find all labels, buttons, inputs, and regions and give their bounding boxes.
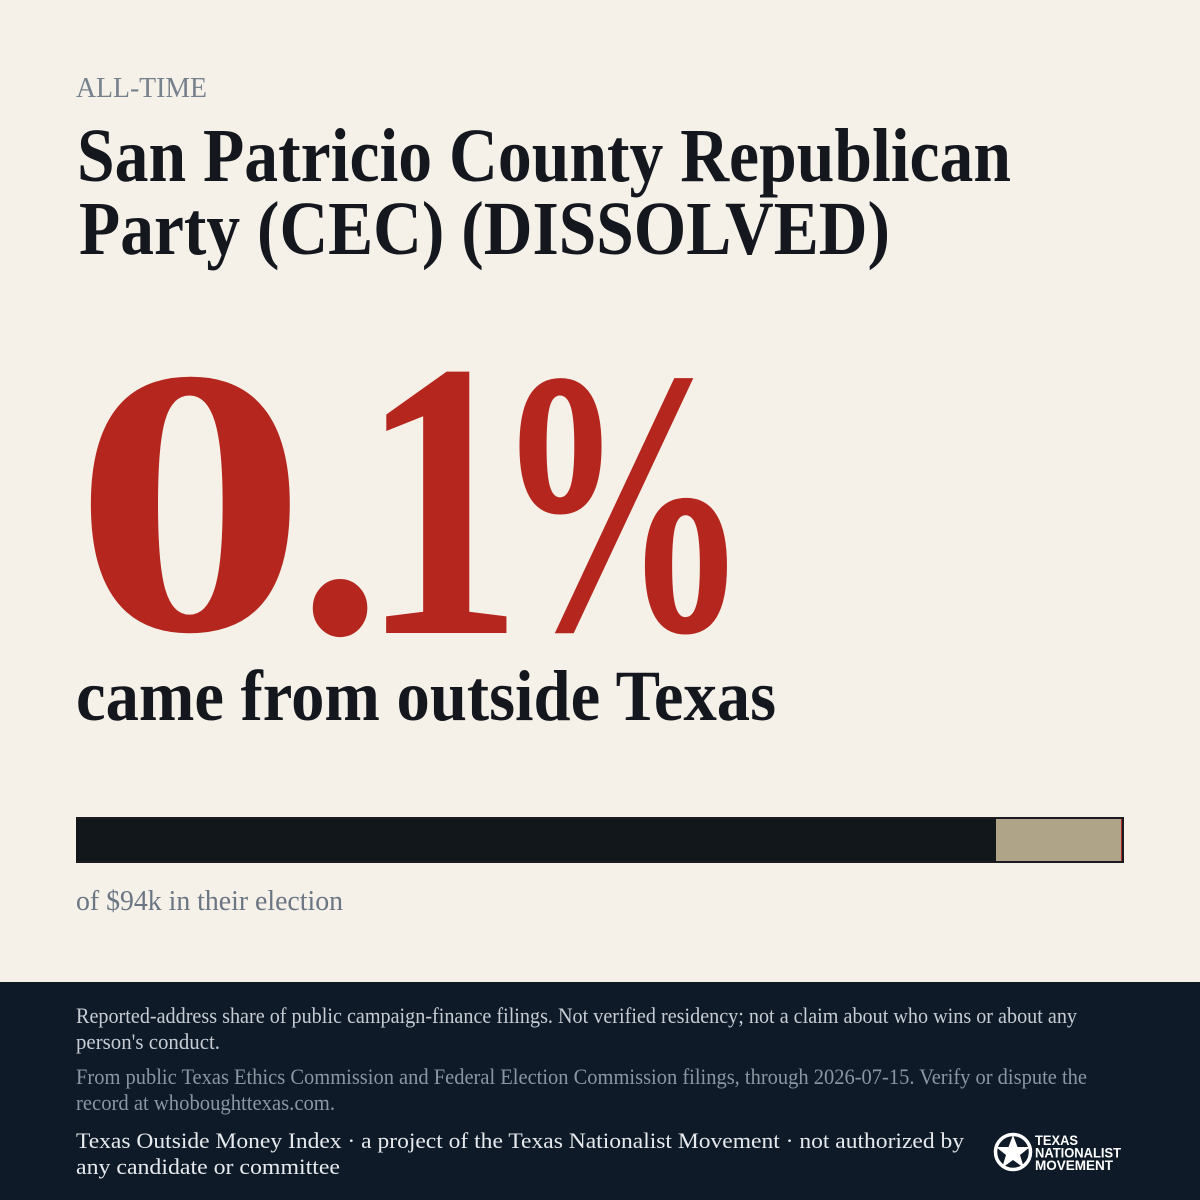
big percentage: % [493,294,751,712]
subheading: came from outside Texas [76,656,776,736]
logo wordmark: TEXAS [1035,1132,1078,1148]
footer panel [0,982,1200,1200]
project credit: any candidate or committee [76,1154,340,1179]
methodology note: person's conduct. [76,1029,220,1054]
title: San Patricio County Republican [77,114,1011,198]
project credit: Texas Outside Money Index · a project of the Texas Nationalist Movement · not authorized by [76,1128,964,1153]
big percentage: 1 [360,281,523,719]
bar caption: of $94k in their election [76,886,343,917]
eyebrow: ALL-TIME: ALL-TIME [76,73,207,104]
logo wordmark [1035,1132,1121,1173]
methodology note: Reported-address share of public campaign-finance filings. Not verified residency; not a claim about who wins or about any [76,1003,1077,1028]
source note: From public Texas Ethics Commission and Federal Election Commission filings, through 2026-07-15. Verify or dispute the [76,1064,1087,1089]
source note: record at whoboughttexas.com. [76,1090,335,1115]
methodology note [76,1003,1077,1054]
big percentage: 0 [73,292,308,712]
logo wordmark: NATIONALIST [1035,1144,1121,1160]
title [77,114,1011,271]
title: Party (CEC) (DISSOLVED) [79,187,890,271]
icon: star in circle [996,1134,1030,1170]
source note [76,1064,1087,1115]
logo wordmark: MOVEMENT [1035,1157,1113,1173]
project credit [76,1128,964,1179]
logo: Texas Nationalist Movement [996,1132,1121,1173]
big percentage [73,281,751,719]
progress bar [76,817,1124,863]
big percentage: . [298,314,382,710]
